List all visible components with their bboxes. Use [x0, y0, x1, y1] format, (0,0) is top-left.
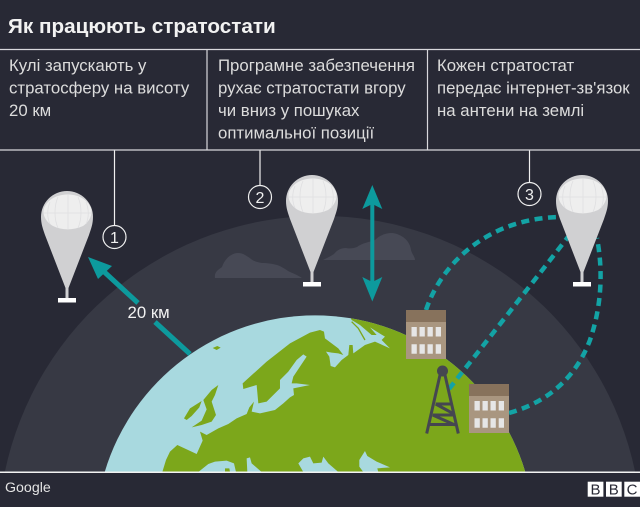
text block: step 3: на антени на землі	[437, 101, 584, 120]
callout marker 1	[103, 150, 126, 248]
source: Google: Google	[5, 480, 51, 496]
building two	[469, 384, 509, 433]
text block: step 2: Програмне забезпечення	[218, 56, 415, 75]
building one	[406, 310, 446, 359]
land: Iceland	[213, 346, 221, 350]
text block: step 1: Кулі запускають у	[9, 56, 147, 75]
arrow: 20 km	[88, 257, 190, 354]
icon: antenna tower	[427, 366, 458, 434]
balloon three	[556, 175, 608, 286]
dashed link: building two to balloon	[509, 238, 601, 413]
balloon two	[286, 175, 338, 286]
text block: step 2: оптимальної позиції	[218, 124, 374, 142]
panel: atmosphere	[5, 216, 635, 472]
text block: step 3: Кожен стратостат	[437, 56, 574, 75]
callout marker 2	[248, 150, 272, 208]
text block: step 2: чи вниз у пошуках	[218, 101, 360, 120]
land: Ireland	[184, 401, 202, 420]
text block: step 3: передає інтернет-зв'язок	[437, 78, 630, 98]
callout marker 3	[518, 150, 541, 206]
logo: BBC	[588, 482, 640, 498]
header grid	[0, 50, 640, 150]
logo: BBC: B	[609, 482, 619, 498]
balloon one	[41, 191, 93, 302]
dashed link: building one to balloon	[426, 217, 563, 310]
land: Italy	[225, 468, 230, 472]
title: Як працюють стратостати	[8, 15, 276, 38]
arrow: up and down	[362, 185, 382, 302]
label: 20 km: 20 км	[128, 303, 170, 322]
text block: step 1: стратосферу на висоту	[9, 78, 190, 98]
callout marker 2: 2	[256, 190, 265, 207]
text block: step 1: 20 км	[9, 101, 51, 120]
icon: cloud left	[215, 253, 302, 278]
icon: cloud right	[323, 233, 415, 260]
land: Great Britain	[192, 385, 218, 427]
logo: BBC: B	[590, 482, 601, 498]
globe	[104, 315, 526, 472]
callout marker 1: 1	[110, 230, 119, 247]
callout marker 3: 3	[525, 187, 534, 204]
logo: BBC: C	[627, 482, 638, 498]
dashed link: tower to balloon	[449, 237, 568, 389]
text block: step 2: рухає стратостати вгору	[218, 78, 406, 98]
land: Eurasia	[162, 318, 525, 472]
footer line	[0, 472, 640, 473]
land: Novaya Zemlya	[352, 322, 365, 340]
